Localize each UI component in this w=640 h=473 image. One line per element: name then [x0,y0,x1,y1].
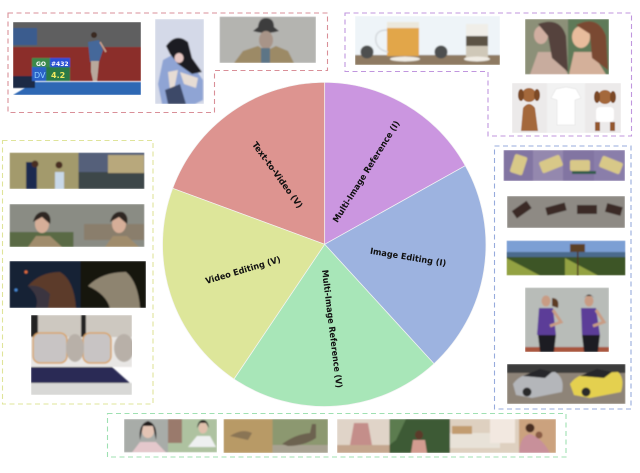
photo: couple in cafe and night street [10,152,144,189]
photo: girl and cartoon girl [525,19,609,74]
panel: text-to-video outline [8,13,328,112]
photo: woman and doctor [124,419,217,452]
photo: puppy, t-shirt, puppy in t-shirt [512,83,621,133]
photo: cat in bread frame [31,315,134,395]
photo: bustard bird pair [224,419,328,453]
photo: woman in snow [155,19,204,104]
label: multi-image reference (V): Multi-Image Reference (V) [319,269,343,389]
photo: gymnast with score overlay: 4.2 [51,71,65,80]
panel: image editing outline [494,146,631,409]
photo: woman at bench before and after [10,204,144,247]
slice: video editing [163,188,325,379]
photo: runner pair [525,288,609,352]
panel: multi-image reference (V) outline [108,414,566,457]
pie chart [163,82,486,406]
label: multi-image reference (I): Multi-Image Reference (I) [331,119,403,225]
photo: dark object on pavement [507,196,625,228]
photo: coastal hills with sign [506,240,626,276]
label: text-to-video: Text-to-Video (V) [249,140,304,211]
slice: multi-image reference (I) [325,82,465,244]
photo: gymnast with score overlay: #432 [51,61,69,68]
slice: multi-image reference (V) [234,244,434,406]
panel: video editing outline [2,140,153,404]
photo: tea and coffee glasses [355,16,500,65]
label: video editing: Video Editing (V) [204,255,282,287]
photo: gymnast with score overlay: GO [36,61,46,68]
panel: multi-image reference (I) outline [345,13,632,136]
slice: text-to-video [173,82,325,244]
photo: toy truck views [504,150,625,181]
photo: gymnast with score overlay: DV [34,71,46,80]
photo: garment, model, bedroom, mother and child [337,419,556,453]
photo: otter pair [10,261,146,308]
slice: image editing [325,166,486,364]
photo: gymnast with score overlay [13,22,141,95]
photo: silver and yellow convertibles [507,364,626,404]
photo: man in hat [220,16,316,63]
label: image editing: Image Editing (I) [369,247,447,269]
